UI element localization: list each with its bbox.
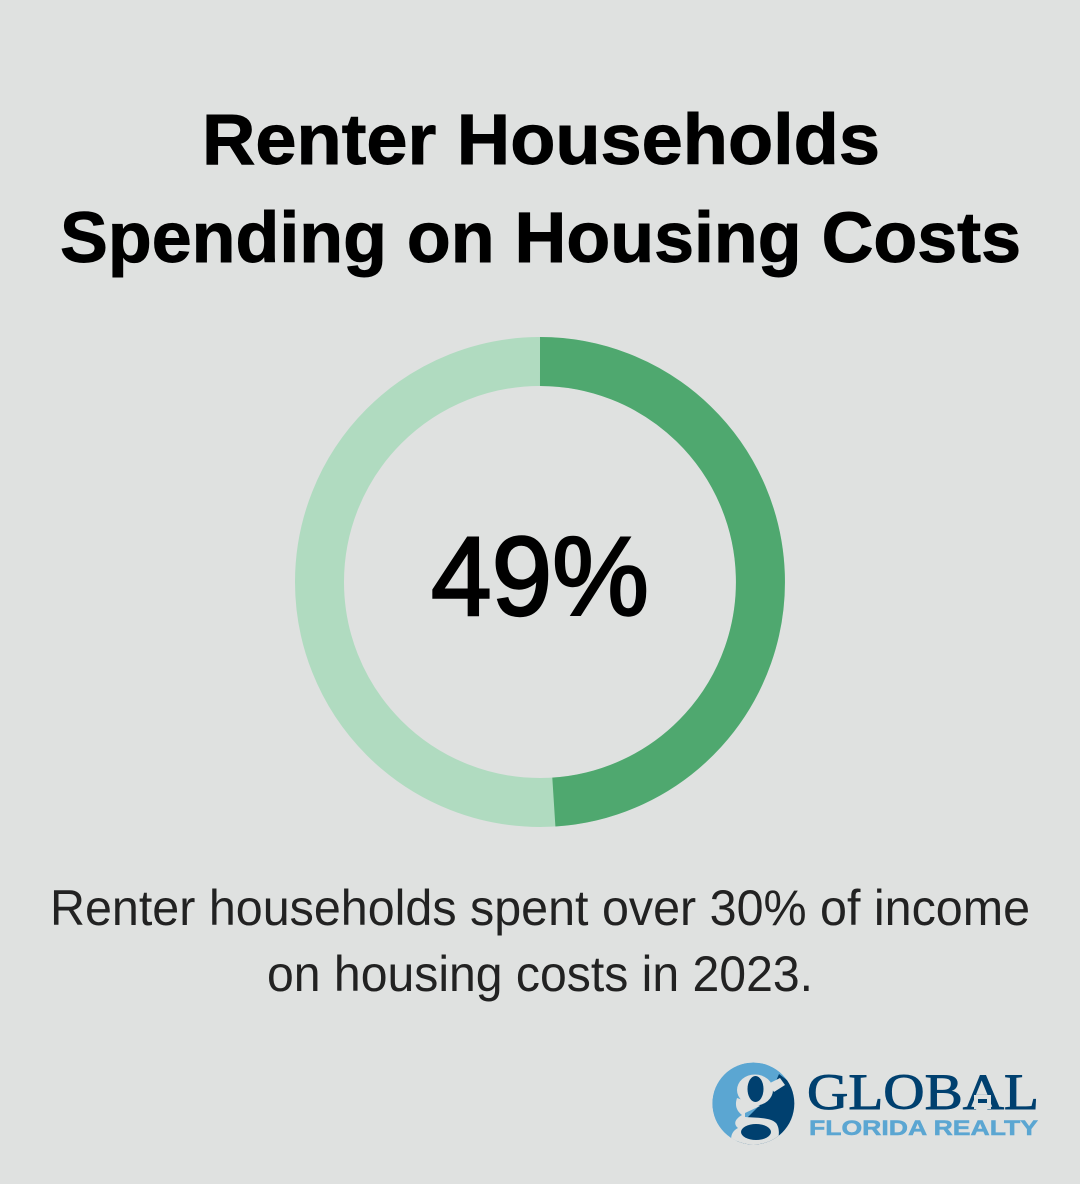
title bbox=[60, 101, 1021, 278]
logo wordmark: GLOBAL: GLOBAL bbox=[807, 1065, 1039, 1121]
logo: Global Florida Realty bbox=[712, 1062, 1039, 1150]
donut remainder track bbox=[320, 362, 760, 802]
infographic canvas bbox=[54, 112, 1038, 1144]
logo icon: g in circle bbox=[712, 1062, 794, 1144]
donut value arc bbox=[540, 362, 760, 802]
description text: Renter households spent over 30% of income bbox=[50, 880, 1030, 936]
description text bbox=[50, 880, 1030, 1002]
donut chart: 49% bbox=[320, 362, 760, 802]
logo wordmark: FLORIDA REALTY: FLORIDA REALTY bbox=[809, 1117, 1038, 1140]
description text: on housing costs in 2023. bbox=[267, 946, 813, 1002]
big percentage: 49% bbox=[431, 514, 649, 639]
title: Spending on Housing Costs bbox=[60, 199, 1021, 278]
title: Renter Households bbox=[202, 101, 880, 180]
